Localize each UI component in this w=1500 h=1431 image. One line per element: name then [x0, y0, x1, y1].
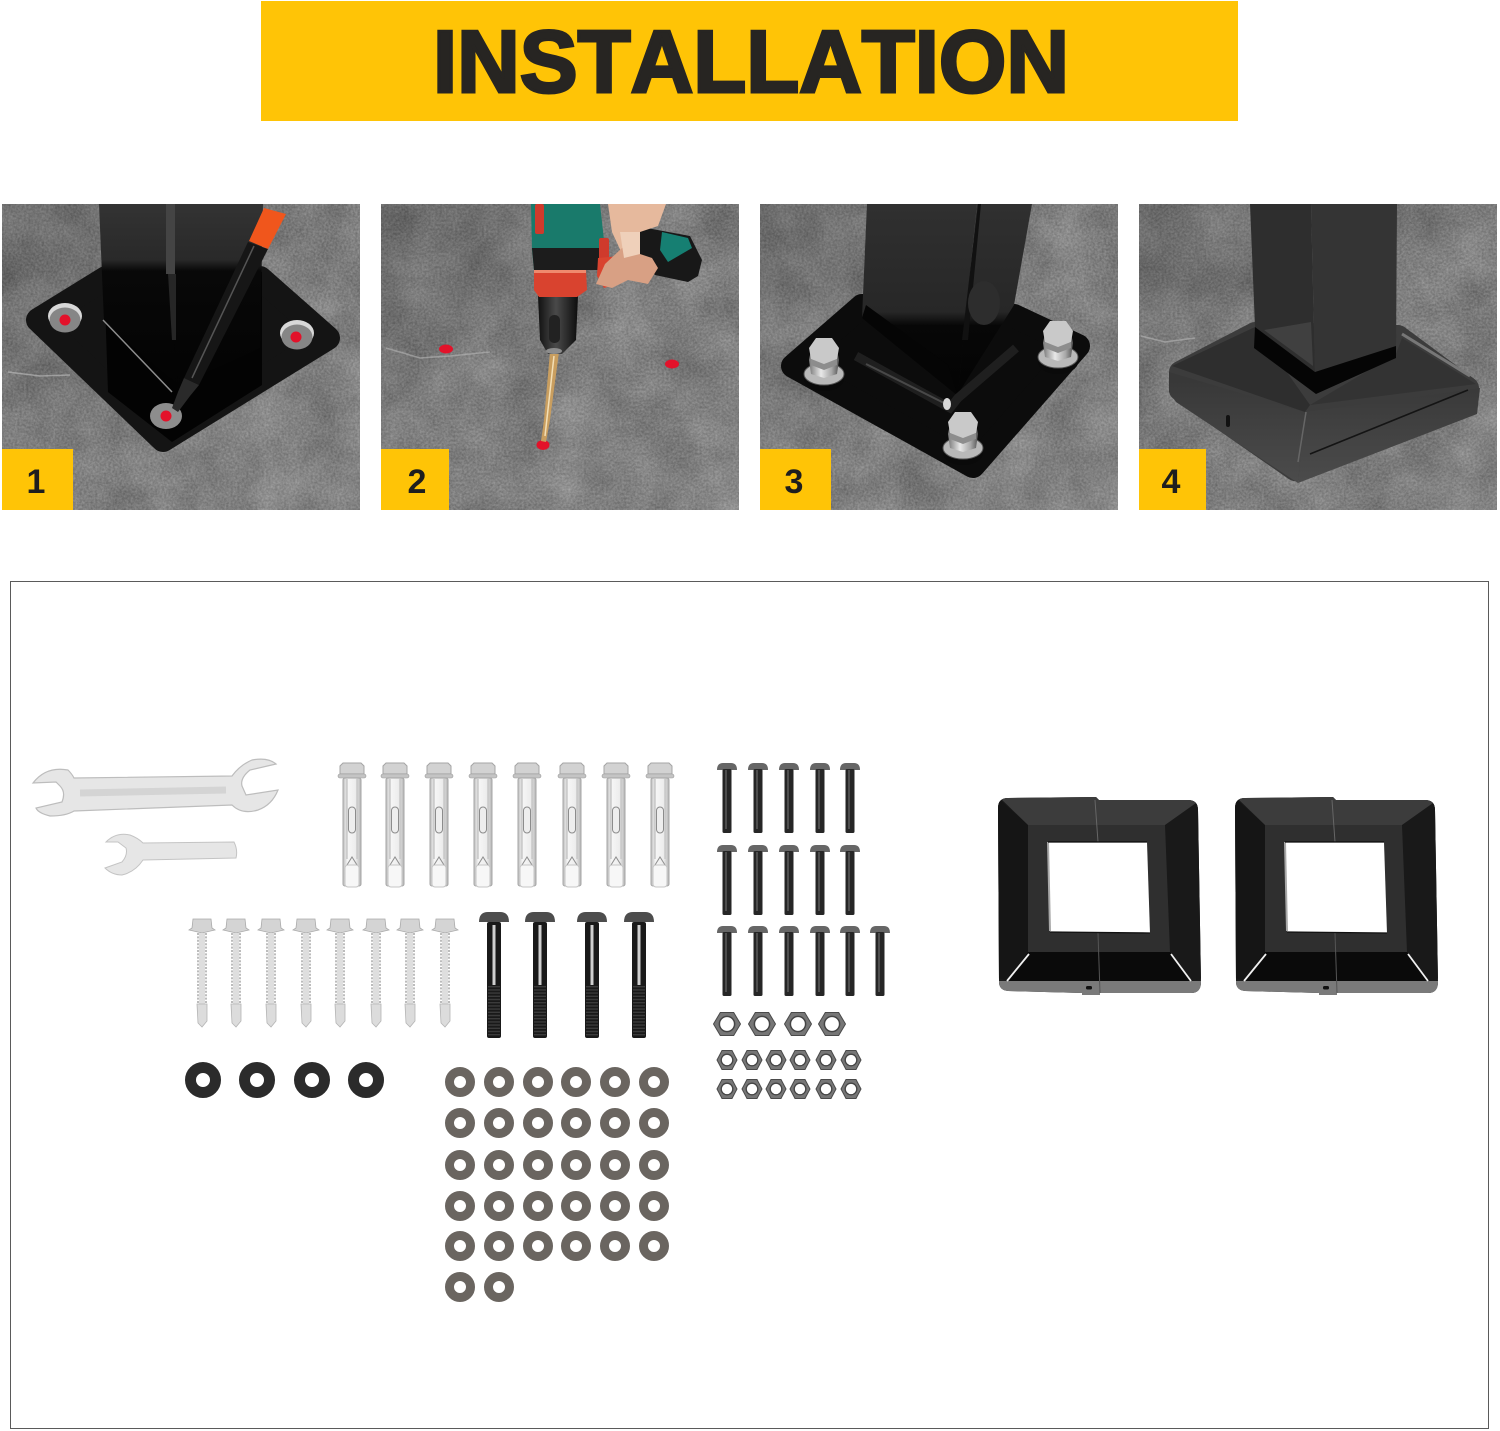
panel: step 1 mark the holes [2, 204, 360, 510]
base cover left [996, 796, 1204, 996]
expansion anchor bolts [338, 763, 674, 887]
post [856, 204, 1032, 410]
step number 2: 2 [408, 463, 426, 501]
small hex nuts [717, 1050, 861, 1098]
drill [531, 204, 702, 442]
panel: step 4 cover [1139, 204, 1497, 510]
step number 3 [760, 449, 831, 510]
base plate [793, 306, 1078, 466]
hex bolts [804, 321, 1078, 465]
post [99, 204, 263, 392]
panel: hardware kit [10, 582, 1488, 1428]
marker pen [172, 208, 286, 412]
large black bolts [479, 912, 654, 1038]
panel: step 3 bolt down [760, 204, 1118, 510]
drilling hole marks [48, 303, 314, 429]
collar [534, 270, 587, 297]
icon: double open-end wrench [33, 759, 278, 816]
large hex nuts [714, 1012, 846, 1036]
step number 1: 1 [27, 463, 45, 501]
title banner [261, 1, 1238, 121]
post [1250, 204, 1397, 394]
drill bit [541, 352, 559, 442]
chuck [538, 296, 578, 354]
red drilling marks [439, 344, 679, 450]
black lock washers [190, 1068, 378, 1092]
title: INSTALLATION [433, 12, 1069, 111]
step number 3: 3 [785, 463, 803, 501]
base cover right [1233, 796, 1441, 996]
base cover [1169, 327, 1480, 483]
step number 4: 4 [1162, 463, 1181, 501]
weld seams [856, 348, 1016, 408]
flat gray washers [450, 1072, 664, 1298]
panel: step 2 drill [381, 204, 739, 510]
self-tapping screws [189, 919, 458, 1027]
step number 1 [2, 449, 73, 510]
small black bolts [717, 763, 890, 996]
battery [640, 228, 702, 282]
base plate [38, 278, 328, 440]
body [531, 204, 606, 270]
icon: small wrench [105, 834, 237, 875]
step number 4 [1139, 449, 1206, 510]
step number 2 [381, 449, 449, 510]
hand [608, 204, 666, 250]
